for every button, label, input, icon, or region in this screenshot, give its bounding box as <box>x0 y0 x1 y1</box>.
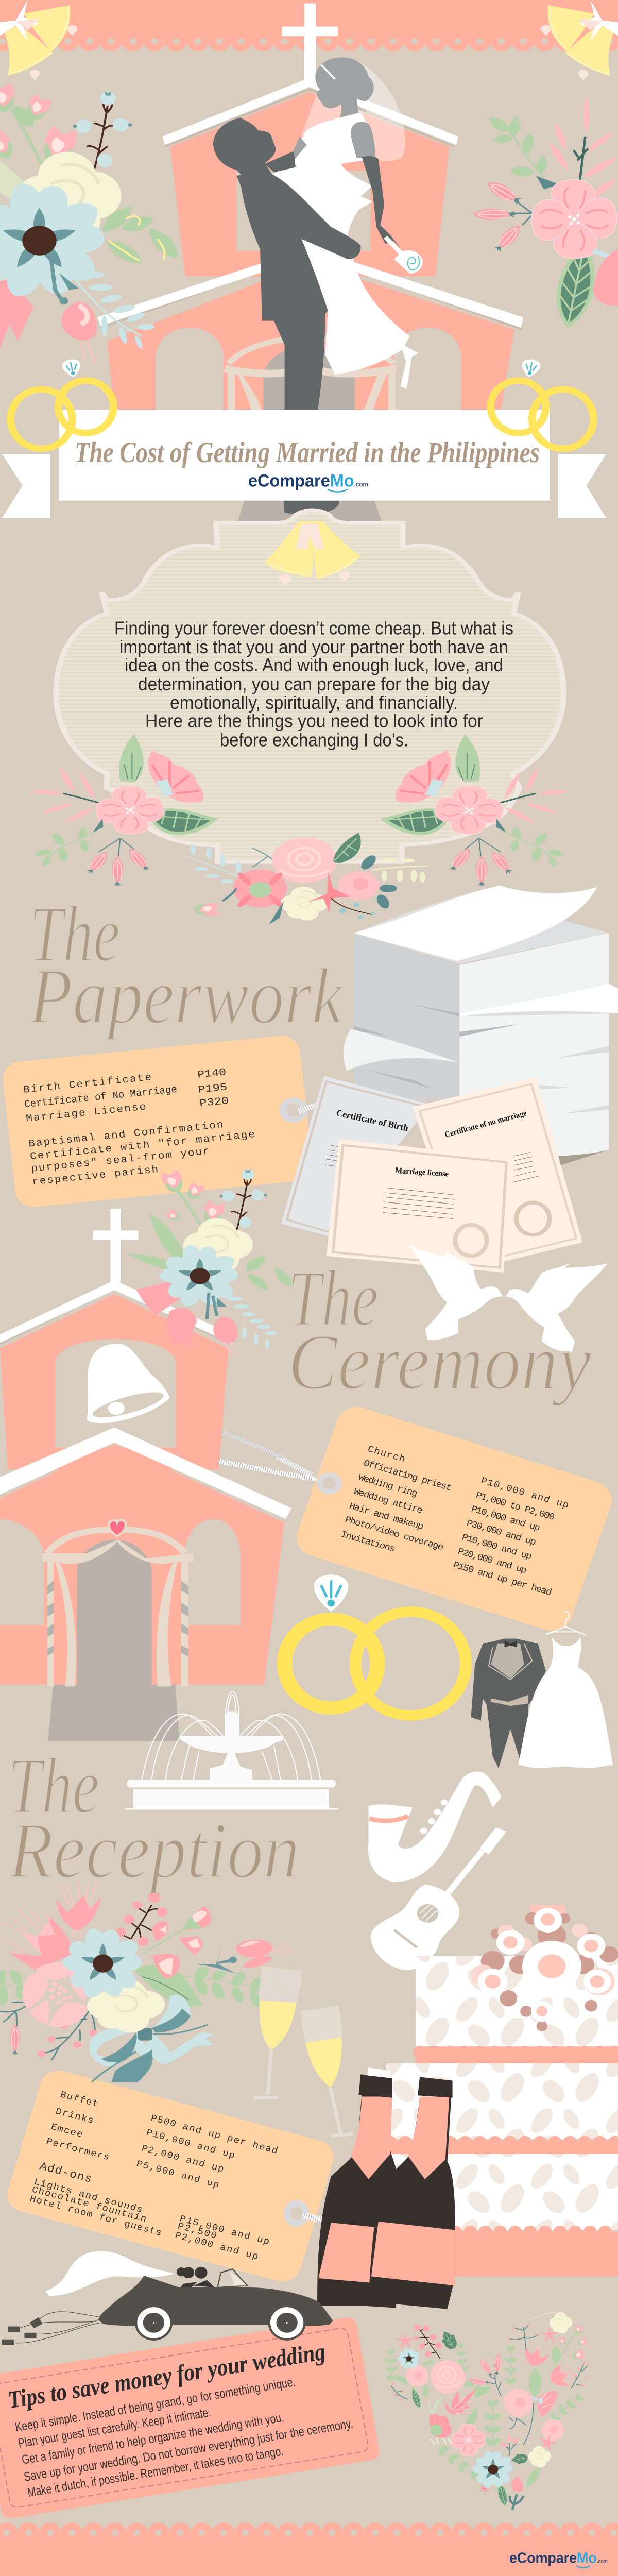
doves <box>409 1245 608 1352</box>
section heading: The Ceremony: The <box>288 1253 379 1343</box>
intro text: idea on the costs. And with enough luck, love, and <box>125 655 503 675</box>
tips list: Make it dutch, if possible. Remember, it takes two to tango. <box>26 2444 285 2500</box>
heart stars <box>396 2326 559 2494</box>
dashed border <box>0 2327 369 2509</box>
heart branches <box>391 2325 588 2510</box>
tag text: P140 <box>197 1067 227 1081</box>
ribbon <box>89 1995 214 2082</box>
tag text <box>339 1444 570 1598</box>
footer logo: eCompareMo: eCompareMo.com <box>509 2550 608 2566</box>
certificate labels: Certificate of Birth <box>335 1108 409 1133</box>
tag text: Baptismal and Confirmation <box>28 1120 224 1150</box>
tag text: P1,000 to P2,000 <box>474 1490 556 1523</box>
certificate of no marriage <box>413 1077 582 1271</box>
section heading: The Reception: Reception <box>8 1806 300 1895</box>
tag text: Emcee <box>49 2122 84 2140</box>
intro text: emotionally, spiritually, and financially. <box>170 692 458 713</box>
intro text <box>114 618 513 750</box>
heart blue flowers <box>397 2348 514 2490</box>
bottle right <box>369 2067 455 2309</box>
marriage licence sheet <box>327 1139 510 1273</box>
paper stack <box>344 886 618 1165</box>
fountain <box>125 1691 338 1810</box>
paperwork price tag <box>1 1034 317 1209</box>
tag text: Chocolate fountain <box>30 2184 148 2225</box>
tag text: P320 <box>199 1095 229 1110</box>
section heading: The Paperwork <box>29 889 344 1041</box>
tips list: Save up for your wedding. Do not borrow everything just for the ceremony. <box>23 2417 354 2484</box>
cake bouquet <box>471 1905 618 1995</box>
door arch <box>47 1530 185 1553</box>
tips panel <box>0 2316 381 2520</box>
veil <box>294 61 405 165</box>
guitar <box>370 1827 506 1970</box>
church upper tier <box>162 4 458 277</box>
right spray <box>381 734 570 887</box>
bride head and arm <box>315 57 374 118</box>
intro text: Here are the things you need to look into for <box>145 711 483 731</box>
tag text: Add-ons <box>38 2160 93 2186</box>
church lower tier with door <box>0 1428 291 1741</box>
certificate labels: Certificate of no marriage <box>443 1108 528 1139</box>
tag text: Hotel room for guests <box>28 2194 163 2239</box>
tag text: Hair and makeup <box>348 1501 425 1532</box>
intro plaque <box>56 510 563 862</box>
tag text: Wedding ring <box>357 1472 419 1499</box>
heart dark berry branch <box>414 2325 442 2359</box>
tag text: P15,000 and up <box>178 2214 271 2247</box>
logo: eCompareMo: eCompareMo.com <box>248 471 368 490</box>
champagne bottles <box>317 2067 455 2309</box>
church with couple <box>97 4 523 535</box>
veil <box>45 2251 176 2296</box>
tag text: Photo/video coverage <box>344 1515 445 1553</box>
tag text: Church <box>366 1444 406 1465</box>
section heading: The Reception: The <box>8 1741 99 1830</box>
heart greenery <box>384 2313 587 2487</box>
floral right <box>473 95 618 330</box>
tag text: respective parish <box>31 1164 159 1188</box>
intro text: Finding your forever doesn’t come cheap. But what is <box>114 618 513 638</box>
section heading: The Paperwork: Paperwork <box>29 952 344 1041</box>
plaque floral wreath <box>29 734 570 887</box>
tips list: Get a family or friend to help organize the wedding with you. <box>21 2411 285 2467</box>
banner panel <box>59 410 550 501</box>
reception bouquet <box>0 1879 290 2082</box>
teal berry branches <box>0 2002 95 2060</box>
wedding cake <box>386 1905 618 2276</box>
tag text: Officiating priest <box>362 1458 453 1494</box>
tag text: P10,000 and up <box>479 1476 570 1511</box>
tag text: P2,500 <box>176 2221 218 2241</box>
tag text: P30,000 and up <box>465 1518 537 1548</box>
flower cluster over church <box>128 1169 296 1358</box>
tag eyelet <box>280 1098 317 1123</box>
tag text: P10,000 and up <box>460 1532 533 1562</box>
tips heading: Tips to save money for your wedding <box>6 2338 328 2414</box>
tag text: P195 <box>197 1082 228 1096</box>
corner bells <box>0 0 618 80</box>
wedding arch and aisle <box>225 338 396 535</box>
champagne glasses <box>253 1967 353 2136</box>
church top with bell <box>0 1209 233 1469</box>
tag text: Certificate of No Marriage <box>24 1084 178 1111</box>
couple <box>177 2267 215 2290</box>
intro text: determination, you can prepare for the big day <box>138 674 490 694</box>
getaway car <box>2 2251 333 2345</box>
large pale bloom <box>23 1962 87 2027</box>
groom <box>213 118 361 515</box>
left spray <box>29 734 219 887</box>
blue flower <box>60 1928 146 2001</box>
tag text: Buffet <box>59 2090 99 2110</box>
saxophone <box>368 1772 501 1882</box>
title banner <box>2 410 606 518</box>
small bells on plaque <box>264 521 360 585</box>
tag text: P2,000 and up <box>174 2230 260 2262</box>
section heading: The Ceremony <box>288 1253 592 1406</box>
tag text: P150 and up per head <box>452 1560 553 1598</box>
floral heart <box>384 2312 590 2510</box>
dark berries <box>115 1893 167 1946</box>
intro text: important is that you and your partner both have an <box>119 637 508 657</box>
tips list <box>14 2375 354 2500</box>
certificate of birth <box>281 1076 432 1237</box>
tag eyelet <box>284 2200 327 2227</box>
strings and cans <box>10 2312 100 2343</box>
wheels <box>135 2305 306 2341</box>
church lower tier <box>97 247 523 413</box>
tag text: P20,000 and up <box>456 1546 528 1576</box>
tips list: Keep it simple. Instead of being grand, go for something unique. <box>14 2375 297 2434</box>
heart leaves and pale blooms <box>408 2312 588 2507</box>
reception price tag <box>3 2066 338 2286</box>
intro text: before exchanging I do’s. <box>220 730 408 750</box>
tag text: P5,000 and up <box>135 2159 220 2191</box>
floral left <box>0 83 184 362</box>
tag text: P2,000 and up <box>140 2143 225 2175</box>
tag text: Birth Certificate <box>23 1072 152 1096</box>
rings with diamonds <box>11 358 594 449</box>
tag text: Marriage License <box>25 1101 146 1125</box>
tag text: Performers <box>45 2137 111 2163</box>
tag text <box>28 2090 279 2262</box>
pink tulip right <box>235 1939 290 1968</box>
certificate labels: Marriage license <box>395 1165 449 1178</box>
section heading: The Paperwork: The <box>29 889 120 978</box>
tag text <box>23 1067 255 1188</box>
bride <box>272 57 423 389</box>
rope and eyelet <box>219 1432 327 1480</box>
tulips and stamens <box>0 1879 101 1970</box>
tag text: Certificate with "for marriage <box>29 1129 255 1163</box>
section heading: The Reception <box>8 1741 300 1895</box>
top scalloped band <box>0 0 618 42</box>
teal sprig <box>192 1947 236 1974</box>
tag text: P500 and up per head <box>149 2113 279 2157</box>
wedding rings large <box>285 1574 466 1716</box>
bride bouquet <box>385 237 423 274</box>
certificates <box>281 1076 582 1273</box>
bottle left <box>317 2067 396 2308</box>
tips list: Plan your guest list carefully. Keep it intimate. <box>17 2405 212 2450</box>
tag text: Drinks <box>54 2106 95 2126</box>
heart pink blooms <box>406 2340 578 2492</box>
banner ribbons <box>2 454 606 518</box>
small church <box>0 1209 291 1741</box>
tuxedo and gown <box>471 1612 613 1768</box>
green sprigs <box>0 1964 289 2008</box>
tag text: P10,000 and up <box>470 1504 541 1534</box>
pink buds <box>142 1906 211 1978</box>
cream rose <box>87 1978 165 2032</box>
tag text: purposes" seal-from your <box>30 1146 210 1175</box>
tag text: Wedding attire <box>352 1486 424 1516</box>
tag text: P10,000 and up <box>145 2128 236 2161</box>
tag text: Invitations <box>339 1529 397 1555</box>
certificate labels <box>335 1108 528 1178</box>
bottom scalloped band <box>0 2533 618 2576</box>
lower flower cluster <box>185 833 430 925</box>
tag text: Lights and sounds <box>32 2177 144 2215</box>
ceremony price tag <box>219 1402 617 1636</box>
